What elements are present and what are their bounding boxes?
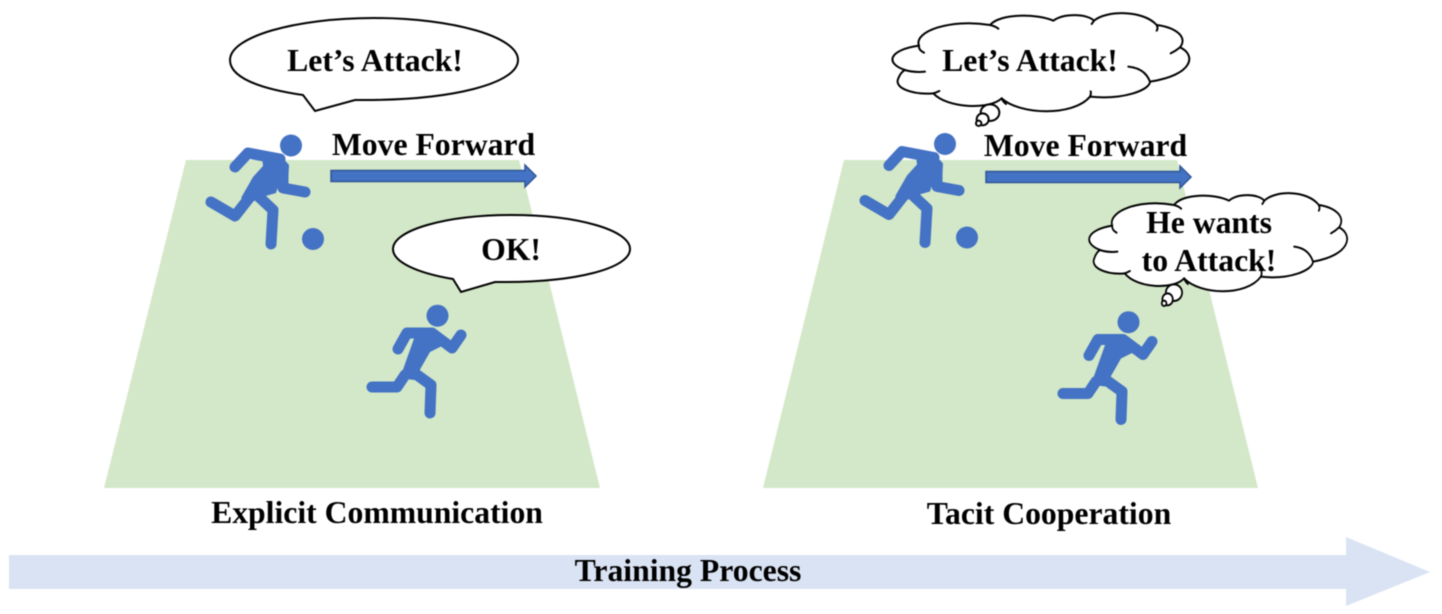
speech bubble: let's attack — [230, 18, 518, 111]
speech bubble: OK — [393, 215, 630, 292]
panel: tacit cooperation field — [763, 160, 1258, 488]
label: explicit communication: Explicit Communication — [211, 495, 543, 530]
thought cloud: let's attack — [892, 13, 1189, 126]
speech bubble: OK: OK! — [481, 232, 541, 267]
heading: move forward right: Move Forward — [984, 128, 1188, 163]
arrow: training process — [9, 537, 1430, 606]
icon: kicking player left — [211, 134, 324, 250]
label: training process: Training Process — [575, 553, 801, 588]
icon: running player right — [1063, 311, 1152, 420]
heading: move forward left: Move Forward — [332, 127, 536, 162]
icon: running player left — [372, 305, 461, 413]
label: tacit cooperation: Tacit Cooperation — [927, 496, 1172, 531]
thought cloud: he wants to attack: to Attack! — [1142, 243, 1276, 278]
thought cloud: he wants to attack: He wants — [1146, 205, 1272, 240]
thought cloud: let's attack: Let’s Attack! — [942, 43, 1118, 78]
arrow: move forward left — [331, 165, 536, 187]
icon: kicking player right — [865, 133, 978, 248]
arrow: move forward right — [986, 166, 1191, 188]
speech bubble: let's attack: Let’s Attack! — [287, 43, 463, 78]
panel: explicit communication field — [104, 160, 600, 488]
thought cloud: he wants to attack — [1089, 193, 1347, 306]
